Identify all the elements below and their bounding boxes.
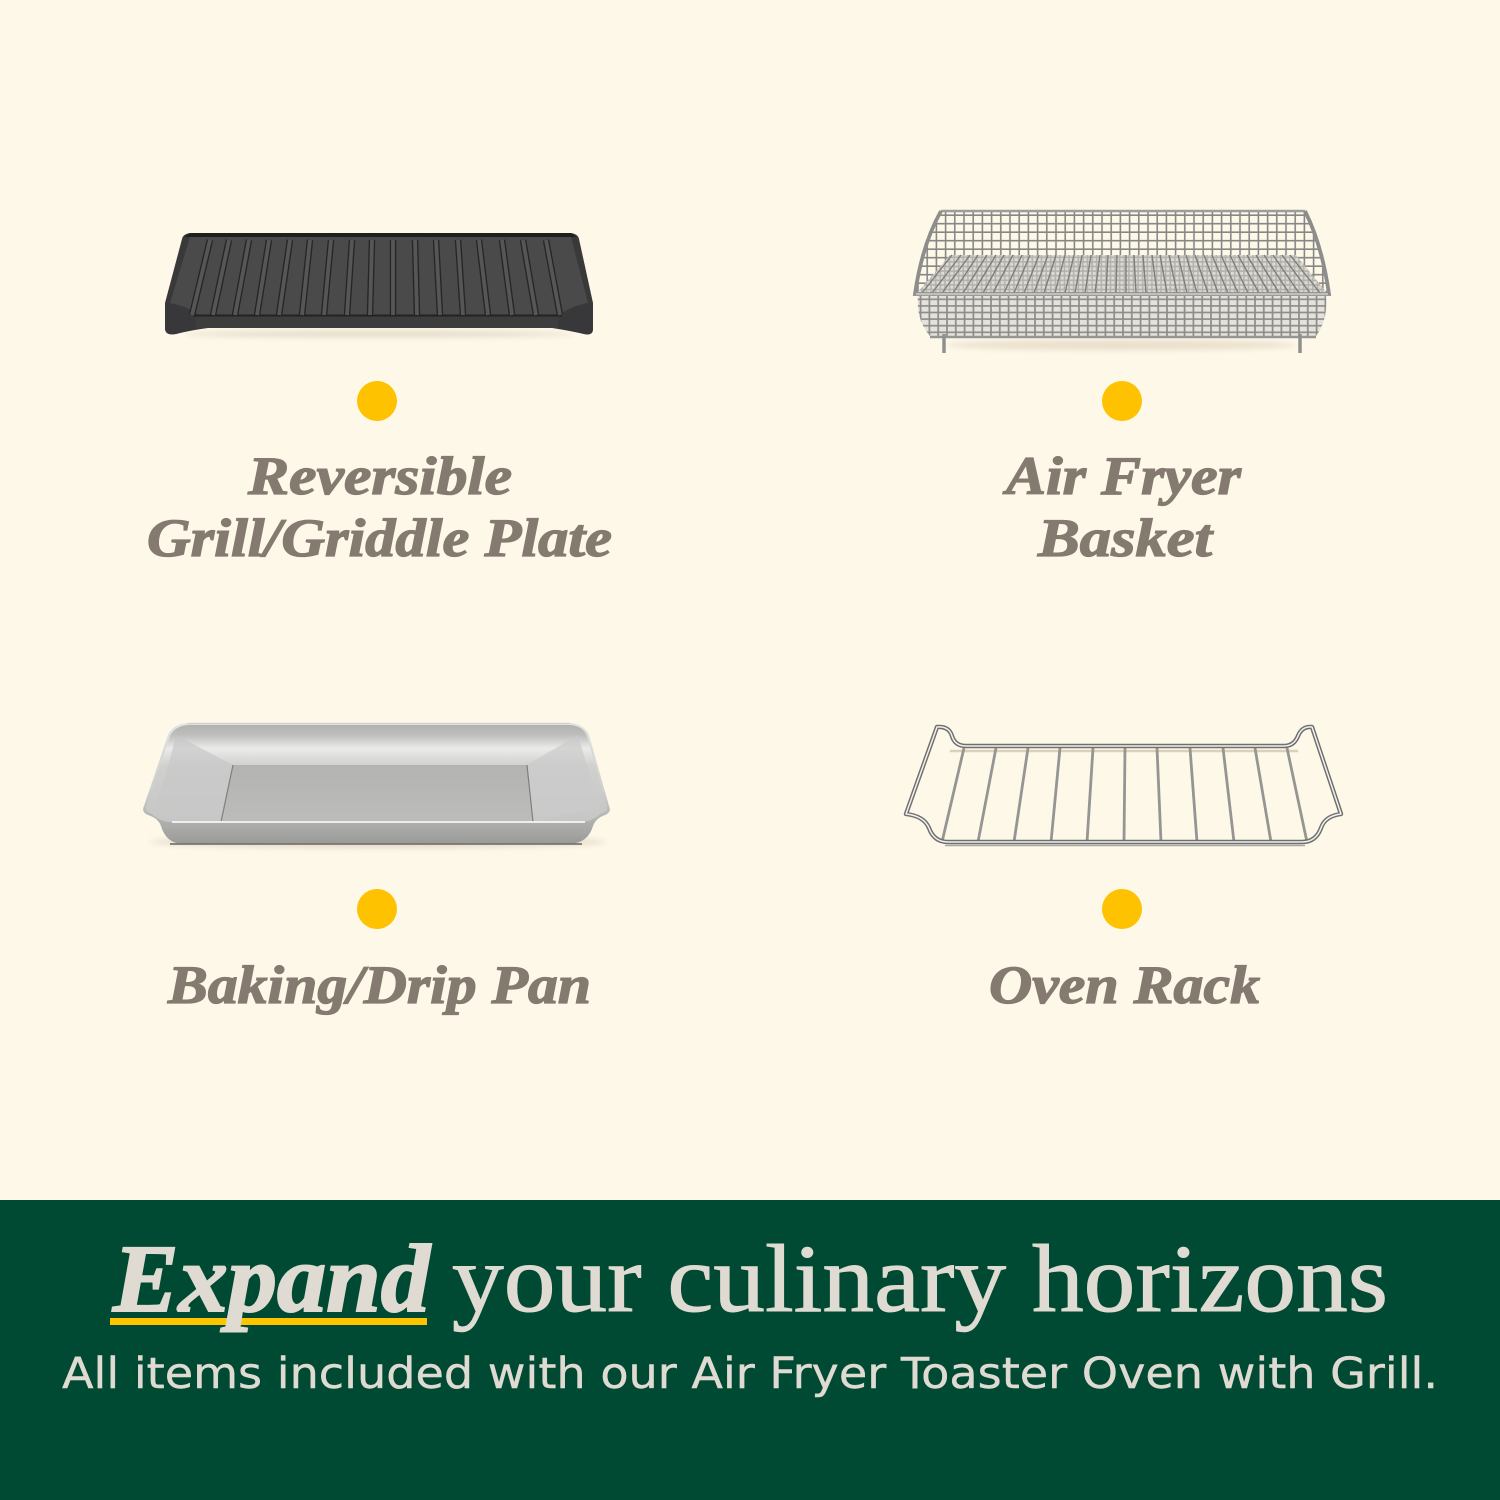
icon: yellow dot [357, 889, 397, 929]
panel: baking/drip pan [143, 723, 610, 1015]
rack frame [906, 727, 1341, 842]
icon: yellow dot [1102, 889, 1142, 929]
icon: mesh basket [915, 211, 1329, 353]
panel: footer banner [0, 1200, 1500, 1500]
icon: grill plate [165, 233, 593, 337]
panel: air fryer basket [915, 211, 1329, 568]
label: reversible grill/griddle plate: Grill/Griddle Plate [147, 508, 612, 568]
label: air fryer basket: Basket [1037, 508, 1214, 568]
panel: oven rack [906, 727, 1341, 1015]
subheading: All items included with our Air Fryer Toaster Oven with Grill. [62, 1349, 1438, 1399]
icon: yellow dot [1102, 381, 1142, 421]
basket legs [944, 334, 1300, 353]
heading underline [110, 1318, 427, 1325]
basket rim [941, 210, 1305, 212]
label: baking/drip pan: Baking/Drip Pan [167, 955, 591, 1015]
icon: wire rack [906, 727, 1341, 846]
heading: your culinary horizons [452, 1225, 1388, 1332]
panel: reversible grill/griddle plate [147, 233, 612, 568]
label: reversible grill/griddle plate: Reversible [247, 446, 512, 506]
grill ribs [192, 240, 560, 315]
icon: baking pan [143, 723, 610, 848]
label: oven rack: Oven Rack [989, 955, 1260, 1015]
heading: Expand [112, 1225, 432, 1332]
icon: yellow dot [357, 381, 397, 421]
rack bars [942, 748, 1307, 842]
label: air fryer basket: Air Fryer [1003, 446, 1242, 506]
